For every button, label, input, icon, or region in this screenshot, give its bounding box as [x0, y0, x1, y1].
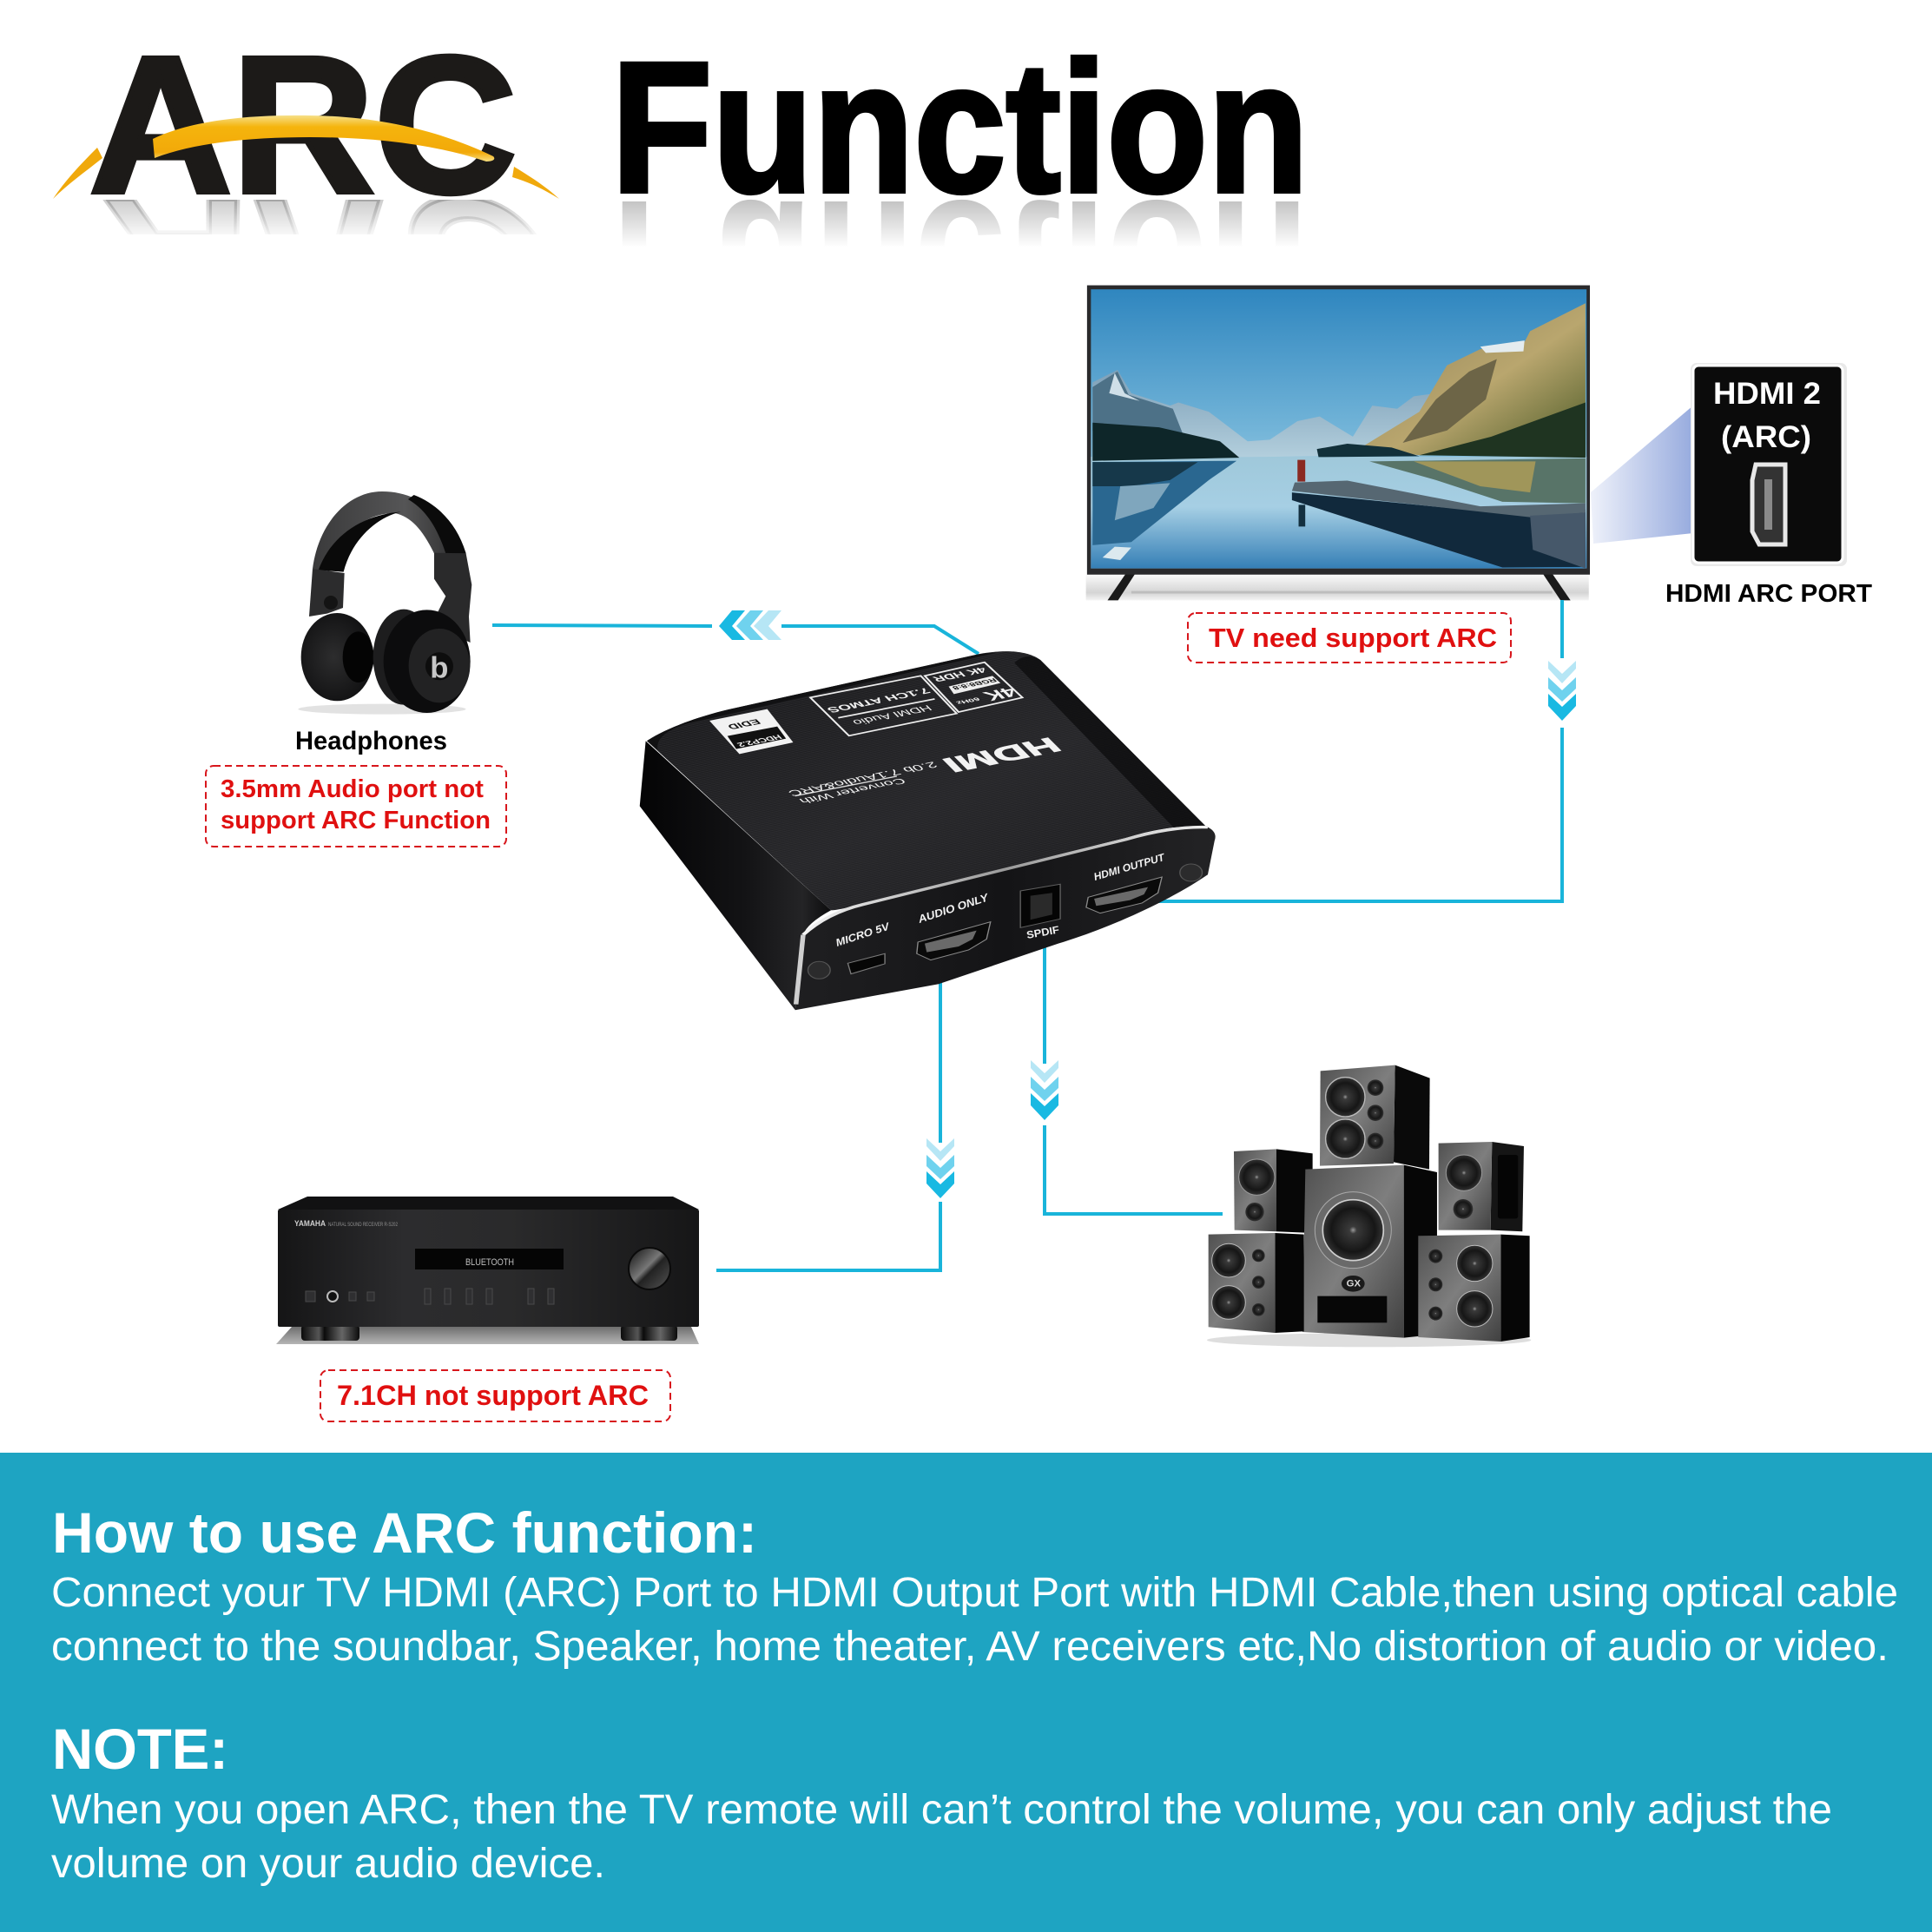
device printing: HDMI OUTPUT [1092, 851, 1167, 883]
panel: HDMI 2 ARC port: (ARC) [1721, 420, 1811, 454]
AV receiver: NATURAL SOUND RECEIVER R-S202 [328, 1223, 398, 1228]
screws [808, 961, 830, 979]
micro usb port [847, 953, 885, 974]
device printing: MICRO 5V [834, 920, 892, 949]
TV [1086, 286, 1590, 600]
callout: TV need support ARC [1188, 613, 1511, 663]
device printing: HDMI Audio [850, 703, 934, 727]
callout: 7.1CH not support ARC [320, 1370, 670, 1421]
shadow [298, 704, 466, 715]
device printing: 2.0b 7.1Audio&ARC [785, 760, 940, 798]
device printing: EDID [725, 717, 763, 731]
body: note: When you open ARC, then the TV remote will can’t control the volume, you can only adjust the [51, 1786, 1832, 1833]
left ear cup [301, 613, 373, 701]
left lower speaker [1209, 1233, 1304, 1333]
panel: HDMI 2 ARC port [1691, 363, 1847, 566]
right lower speaker [1418, 1235, 1530, 1342]
top speaker [1320, 1065, 1430, 1170]
brand text: YAMAHA [294, 1219, 326, 1228]
left upper speaker [1234, 1149, 1313, 1233]
subwoofer [1302, 1165, 1437, 1338]
HDMI port zoom callout beam [1591, 406, 1693, 544]
display [415, 1249, 564, 1269]
beats logo: b [430, 652, 448, 685]
right yoke [432, 553, 471, 643]
callout: 3.5mm audio port: 3.5mm Audio port not [221, 775, 484, 803]
heading: note: NOTE: [52, 1717, 228, 1781]
right upper speaker [1439, 1142, 1524, 1231]
front face [795, 828, 1216, 1010]
back left bevel [647, 653, 997, 749]
body: note [51, 1786, 1832, 1887]
device printing: Converter With [797, 776, 908, 806]
yellow swoosh [153, 115, 494, 162]
connector: TV to HDMI output [1151, 600, 1576, 901]
hdmi output port [1086, 877, 1162, 913]
arrow: down chevrons [1031, 1060, 1058, 1120]
front panel [278, 1210, 699, 1327]
device printing: 60Hz [954, 696, 981, 705]
device printing: HDMI [936, 733, 1067, 776]
connector: audio only to receiver [716, 971, 954, 1270]
feet [301, 1325, 359, 1341]
device printing: SPDIF [1025, 924, 1060, 941]
title reflection: Function [611, 162, 1309, 369]
subwoofer: GX [1347, 1279, 1361, 1289]
body: how to use: Connect your TV HDMI (ARC) Port to HDMI Output Port with HDMI Cable,then using optical cable [51, 1569, 1898, 1616]
dock [1292, 492, 1586, 568]
HDMI converter device [640, 651, 1216, 1010]
top face [647, 651, 1206, 910]
callout: TV need support ARC: TV need support ARC [1209, 623, 1497, 653]
person [1297, 460, 1305, 482]
left side [640, 741, 831, 1010]
body: how to use [51, 1569, 1898, 1670]
title: Function [611, 24, 1309, 369]
device printing: HDCP2.2 [735, 733, 783, 748]
headphones [298, 491, 471, 715]
label: Headphones: Headphones [295, 727, 447, 755]
title: Function: Function [611, 24, 1309, 231]
device printing: 4K HDR [930, 665, 989, 683]
icon: HDMI socket [1752, 465, 1785, 544]
logo reflection: ARC [86, 157, 589, 375]
left yoke [309, 569, 345, 617]
device printing: 4K [979, 684, 1022, 704]
title: ARC logo [53, 54, 559, 234]
right ear cup [373, 610, 434, 705]
front controls [306, 1289, 554, 1304]
label: HDMI ARC PORT: HDMI ARC PORT [1665, 580, 1872, 608]
volume knob [629, 1248, 670, 1289]
printed boxes [810, 676, 957, 735]
device printing [725, 665, 1167, 949]
callout: 3.5mm audio port [206, 766, 506, 847]
speaker system [1207, 1065, 1531, 1347]
body: note: volume on your audio device. [51, 1840, 605, 1887]
silver edge [803, 828, 1208, 935]
device printing: AUDIO ONLY [916, 891, 992, 926]
callout: 7.1CH not support ARC: 7.1CH not support ARC [337, 1380, 649, 1411]
heading: how to use: How to use ARC function: [52, 1500, 757, 1565]
audio only port [917, 922, 991, 960]
device printing: 7.1CH ATMOS [824, 686, 933, 715]
connector: headphones to converter [492, 610, 979, 654]
AV receiver [276, 1197, 699, 1344]
arrow: down chevrons [1548, 661, 1576, 721]
arrow: down chevrons [926, 1138, 954, 1198]
shelf surface [276, 1327, 699, 1344]
right bevel of top face [1014, 656, 1206, 828]
port label: HDMI 2 [1713, 377, 1821, 411]
spdif port [1020, 884, 1060, 927]
device printing: RGB8:8:8 [951, 677, 999, 691]
callout: 3.5mm audio port: support ARC Function [221, 807, 491, 834]
TV stand and legs [1086, 574, 1589, 600]
body: how to use: connect to the soundbar, Speaker, home theater, AV receivers etc,No distortion of audio or video. [51, 1623, 1889, 1670]
connector: SPDIF to speakers [1031, 944, 1223, 1214]
arc swoosh tails [53, 148, 559, 199]
panel: how to use [0, 1453, 1932, 1932]
arrow: left chevrons [719, 610, 781, 640]
AV receiver: BLUETOOTH [465, 1257, 514, 1268]
top cover [278, 1197, 699, 1210]
floor shadow [1207, 1333, 1531, 1347]
TV screen photo [1087, 286, 1590, 575]
headband [313, 491, 466, 570]
logo letters: ARC [89, 16, 517, 234]
